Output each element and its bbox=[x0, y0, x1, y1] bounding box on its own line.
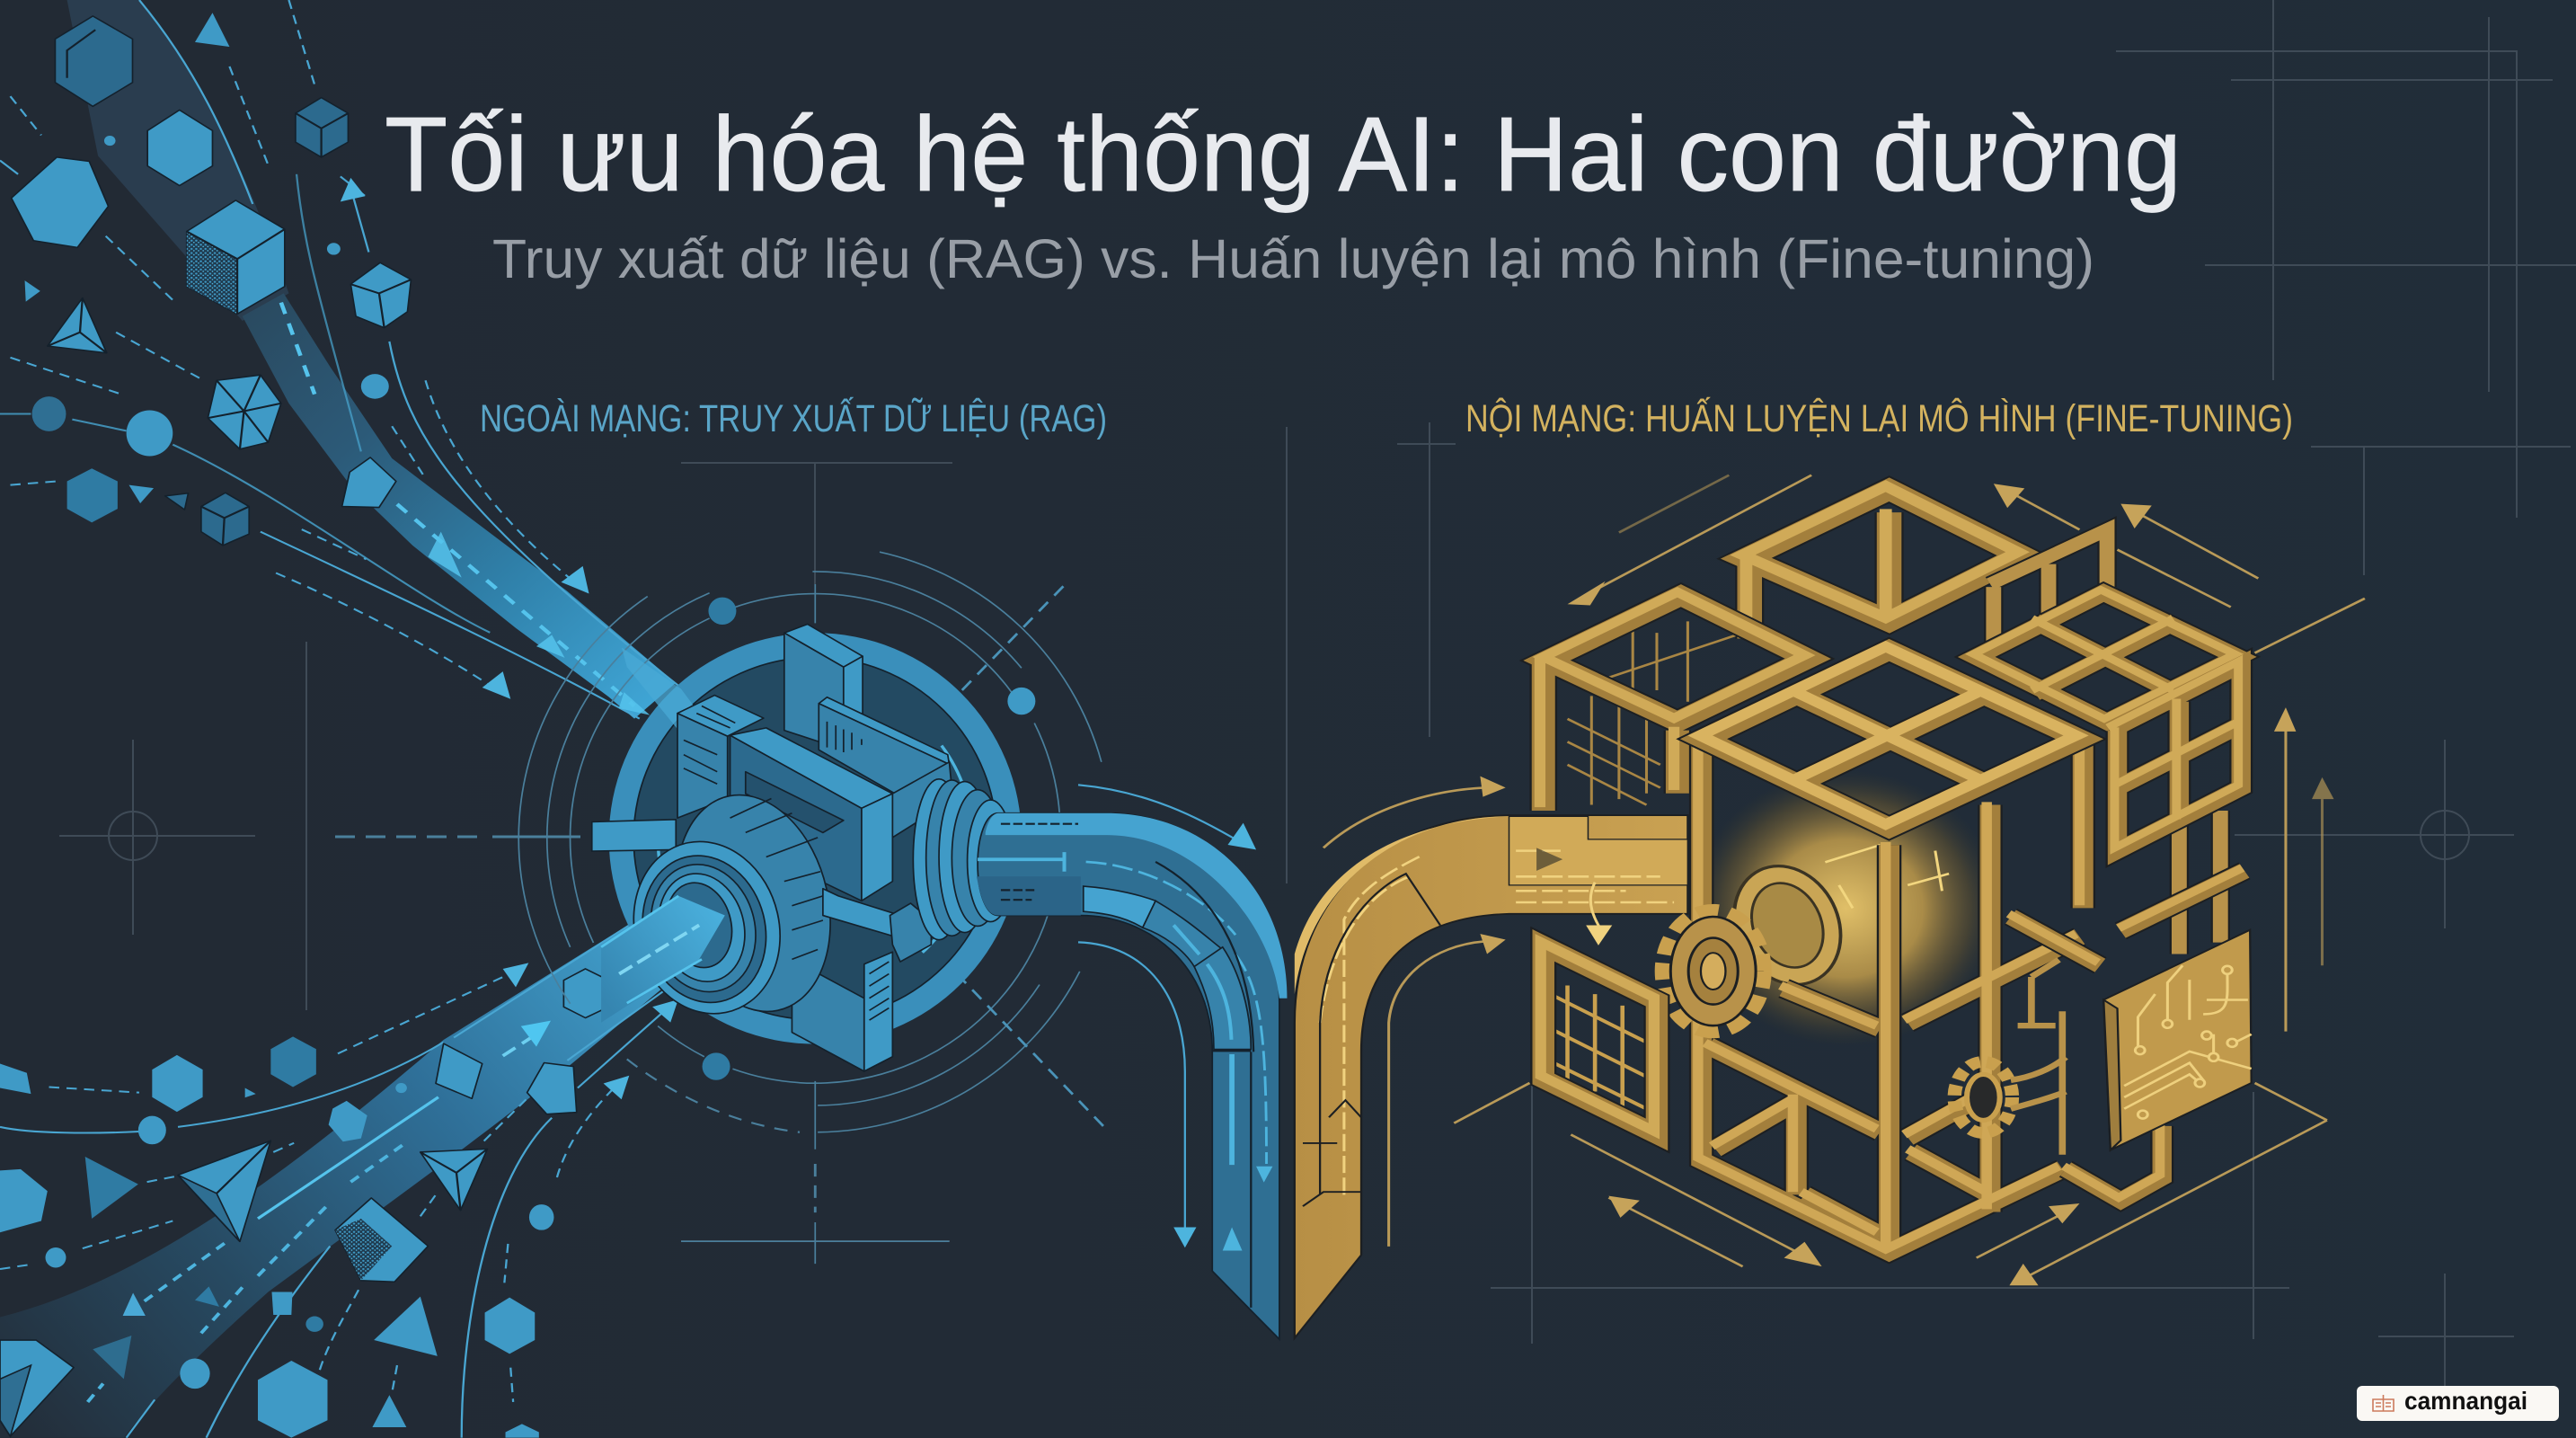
fine-tuning cube assembly bbox=[1295, 475, 2365, 1338]
data shapes: upper bbox=[12, 13, 411, 546]
right frames bbox=[1974, 529, 2241, 954]
data stream beam: lower bbox=[0, 895, 727, 1438]
outlet coupling rings bbox=[913, 779, 1014, 940]
horizontal left bar bbox=[592, 820, 676, 851]
flow: upper-left data stream bbox=[0, 0, 681, 719]
gold connector rods bbox=[2009, 868, 2244, 1201]
inlet pipe bbox=[601, 896, 725, 1023]
grid panel bbox=[1541, 942, 1657, 1134]
orbit rings and markers bbox=[503, 552, 1109, 1264]
icon: open book bbox=[2373, 1395, 2394, 1411]
central frame bbox=[1698, 646, 2083, 1252]
large gear bbox=[1667, 914, 1760, 1028]
stream lines and dashes: upper bbox=[0, 0, 681, 719]
circuit board panel bbox=[2103, 930, 2252, 1150]
rear panel bbox=[819, 697, 950, 794]
subtitle: Truy xuất dữ liệu (RAG) vs. Huấn luyện lại mô hình (Fine-tuning) bbox=[492, 228, 2094, 289]
outflow arrows bbox=[1078, 785, 1256, 1247]
central RAG hub machine bbox=[503, 552, 1287, 1339]
left frame with mesh bbox=[1540, 592, 1808, 811]
back tower bbox=[784, 624, 863, 750]
flow: lower-left data stream bbox=[0, 895, 727, 1438]
small gear bbox=[1954, 960, 2066, 1155]
drum coupling on inlet side bbox=[617, 781, 851, 1026]
inbound beam into hub bbox=[622, 647, 725, 748]
lower tower bbox=[792, 952, 892, 1071]
data shapes: lower bbox=[0, 969, 608, 1438]
watermark badge bbox=[2357, 1386, 2559, 1421]
gold direction arrows bbox=[1323, 475, 2365, 1285]
main box bbox=[730, 728, 952, 901]
watermark text: camnangai bbox=[2404, 1387, 2527, 1415]
heading: RAG path: NGOÀI MẠNG: TRUY XUẤT DỮ LIỆU (RAG) bbox=[480, 397, 1107, 440]
heading: fine-tuning path: NỘI MẠNG: HUẤN LUYỆN LẠI MÔ HÌNH (FINE-TUNING) bbox=[1465, 397, 2293, 440]
top-left data block bbox=[677, 696, 764, 818]
glowing core bbox=[1691, 770, 2000, 1046]
data stream beam: upper bbox=[243, 293, 676, 719]
stream lines and dashes: lower bbox=[0, 895, 712, 1438]
cross arm bbox=[823, 889, 931, 962]
faint band behind top shapes bbox=[67, 0, 288, 321]
back frames bbox=[1743, 486, 2021, 639]
outlet pipe bbox=[977, 813, 1287, 1339]
gold inlet pipe bbox=[1295, 815, 1687, 1338]
hub ring disc bbox=[609, 633, 1022, 1044]
title: Tối ưu hóa hệ thống AI: Hai con đường bbox=[385, 95, 2182, 214]
